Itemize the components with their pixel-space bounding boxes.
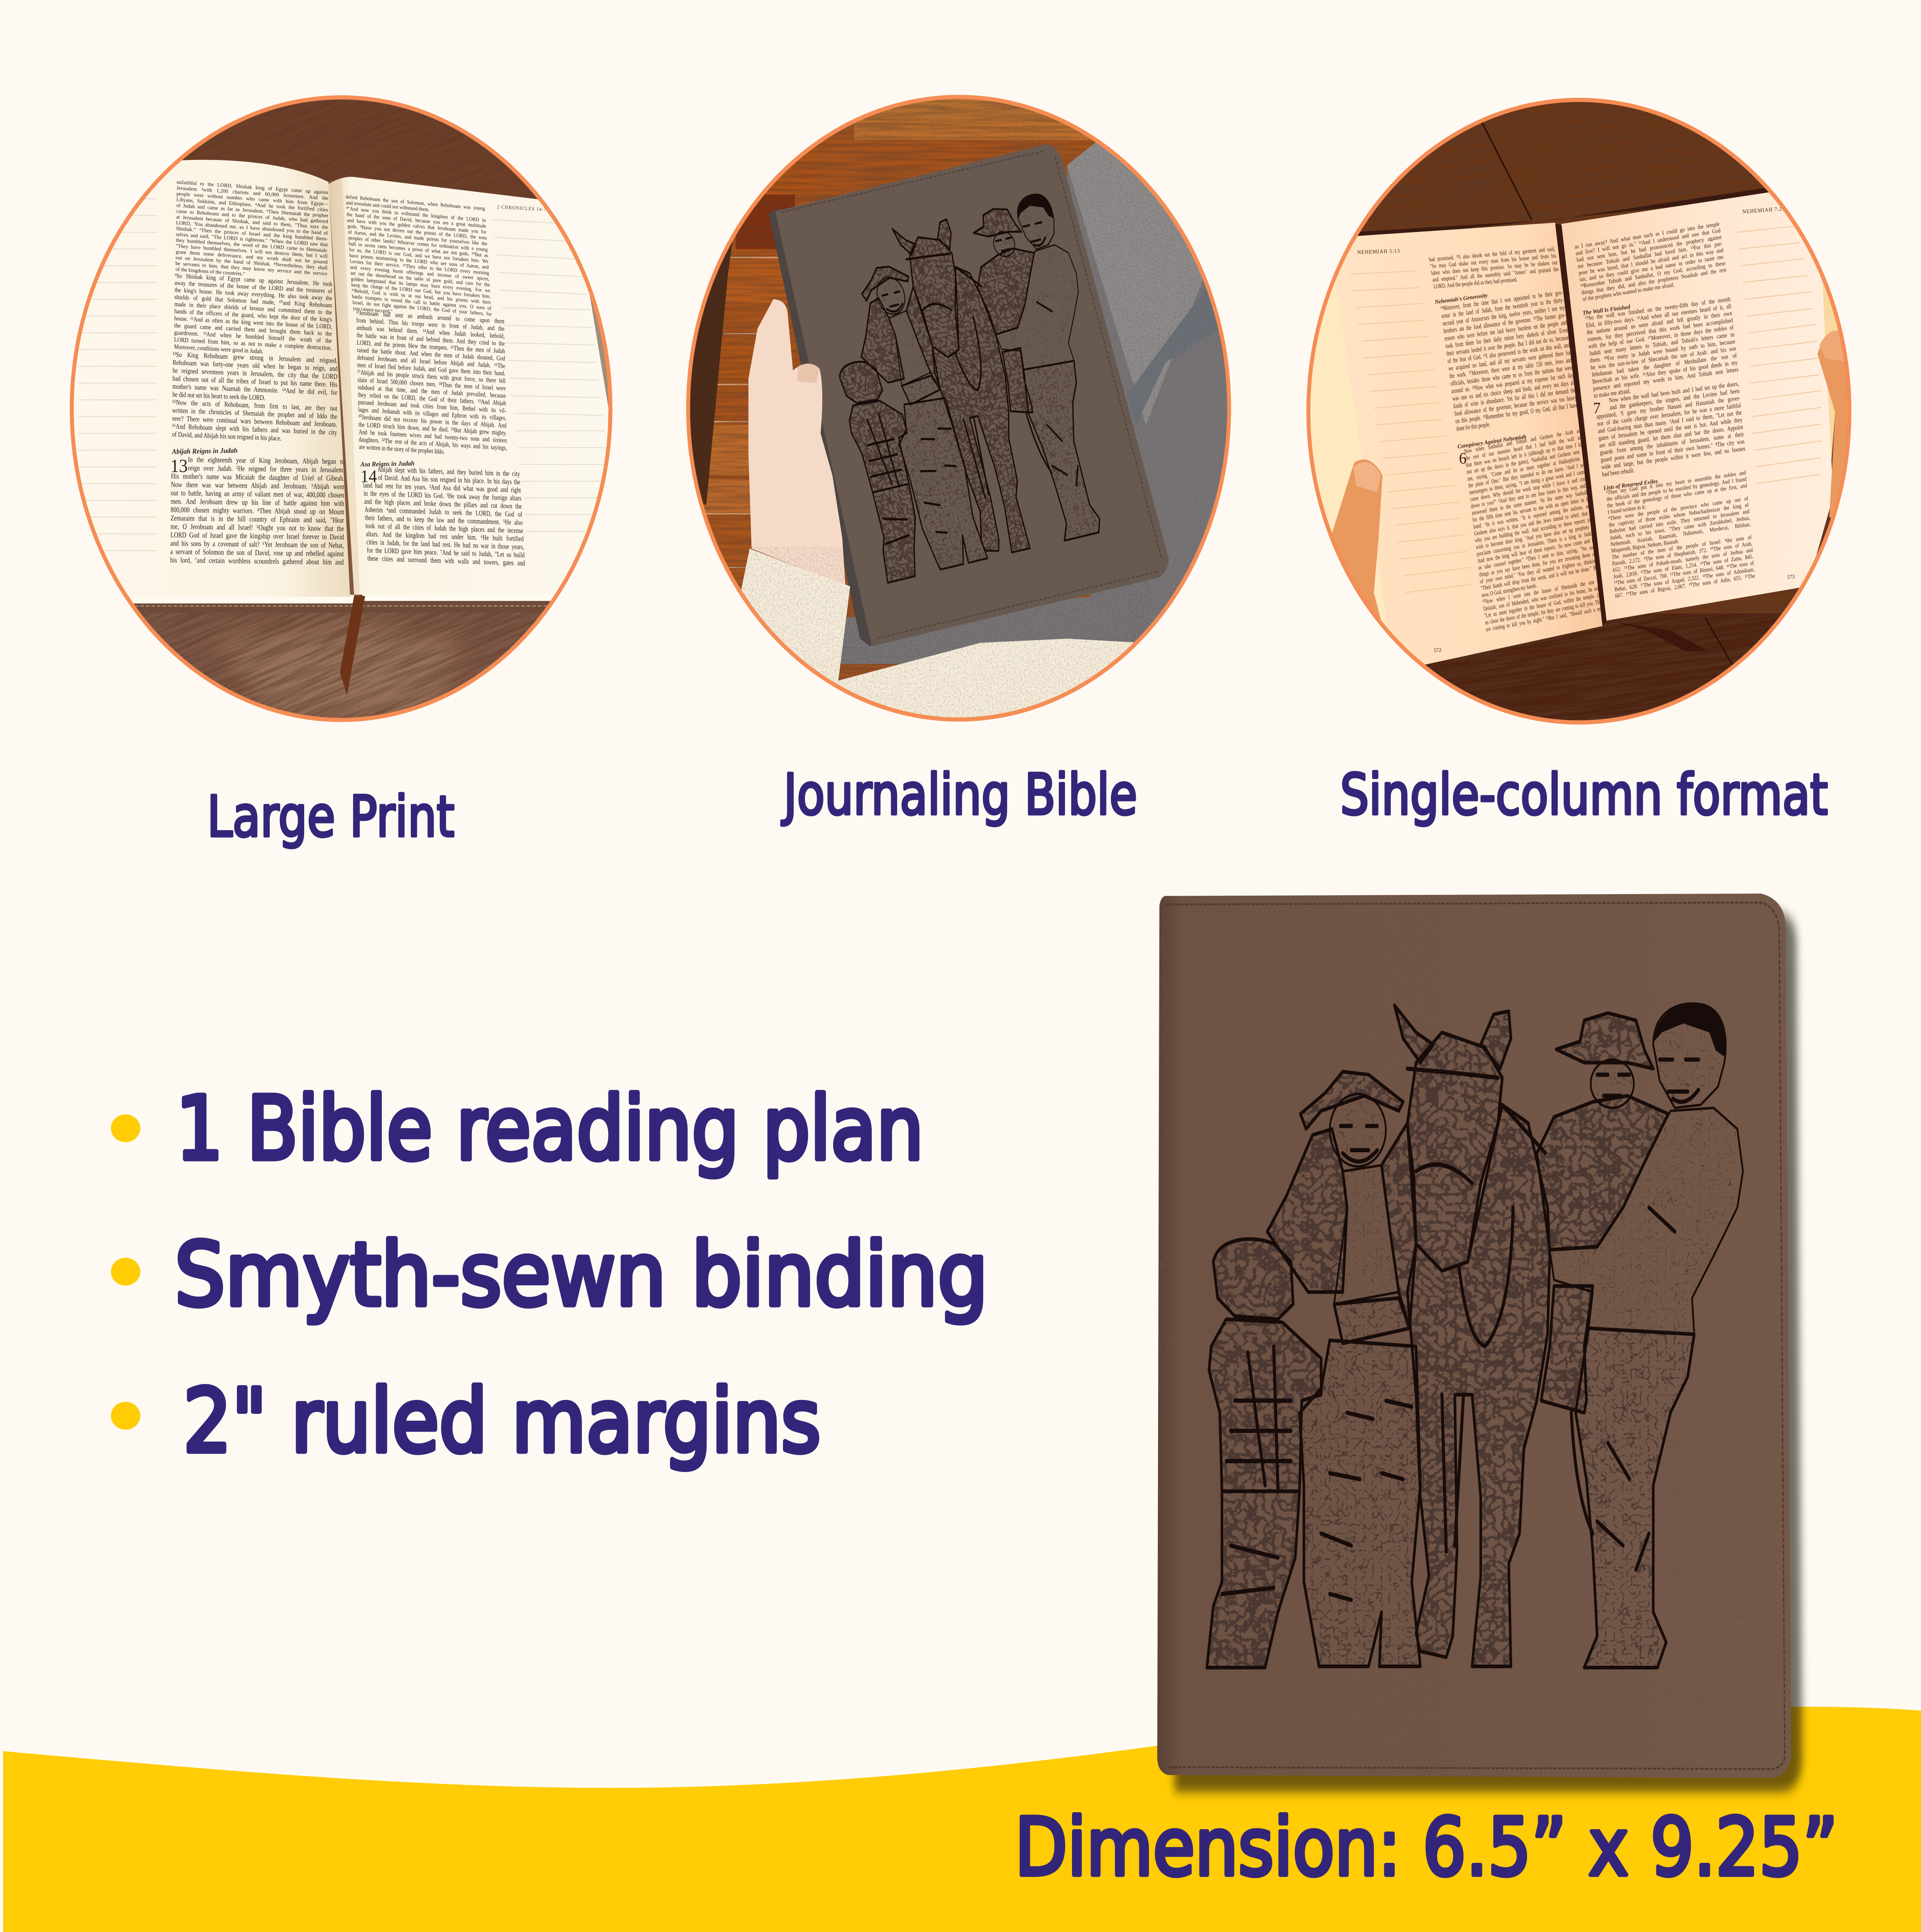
page stack edge xyxy=(1307,274,1390,641)
dark gutter xyxy=(1555,224,1606,626)
caption: Journaling Bible: Journaling Bible xyxy=(781,762,1137,828)
right page text: nehemiah column: of the prophets who wanted to make me afraid. xyxy=(1582,281,1675,303)
hands holding the book xyxy=(1331,459,1386,639)
photo circle: large print open Bible xyxy=(70,95,613,722)
right page text: chronicles column: 14 xyxy=(361,466,377,486)
cover xyxy=(1157,893,1791,1778)
large engraved leather Bible cover xyxy=(1157,893,1802,1792)
photo circle: journaling Bible held in hand xyxy=(618,77,1327,734)
right page text: chronicles column: are written in the story of the prophet Iddo. xyxy=(359,443,445,456)
orange ring xyxy=(72,97,611,720)
right page text: nehemiah column: Now when the wall had been built and I had set up the doors, and the gatekeepers, the singers, and the Levites had been appointed, ²I gave my brother Hanani and Hananiah the gover- nor of the castle charge over Jerusalem, for he was a more faithful and God-fearing man than many. ³And I said to them, "Let not the gates of Jerusalem be opened until the sun is hot. And while they are still standing guard, let them shut and bar the doors. Appoint guards from among the inhabitants of Jerusalem, some at their guard posts and some in front of their own homes." ⁴The city was wide and large, but the people within it were few, and no houses xyxy=(1596,380,1746,471)
bullet 2 xyxy=(111,1258,140,1286)
left page text: nehemiah column: done for this people. xyxy=(1456,420,1491,432)
right page text: chronicles column: 2 CHRONICLES 14:7 xyxy=(497,204,546,213)
right page text: nehemiah column: The Wall Is Finished xyxy=(1582,304,1631,316)
left page text: nehemiah column: now, O God, strengthen my hands. xyxy=(1481,582,1537,599)
ruled margin lines xyxy=(78,182,608,551)
left page text: nehemiah column: 6 xyxy=(1459,449,1467,467)
grey jeans xyxy=(838,140,1233,680)
left page text: nehemiah column: Nehemiah's Generosity xyxy=(1434,292,1488,306)
book drop shadow xyxy=(1170,912,1802,1792)
left page text: chronicles column: Abijah Reigns in Judah xyxy=(172,446,238,456)
left page xyxy=(1334,223,1603,666)
right page text: nehemiah column: to make me afraid. xyxy=(1593,387,1631,399)
right page text: chronicles column: you cannot succeed." xyxy=(352,305,393,315)
left page text: nehemiah column: Now when Sanballat and Tobiah and Geshem the Arab and the rest of our enemies heard that I had built the wall and that there was no breach left in it (although up to that time I had not set up the doors in the gates), ²Sanballat and Geshem sent to me, saying, "Come and let us meet together at Hakkephirim in the plain of Ono." But they intended to do me harm. ³And I sent messengers to them, saying, "I am doing a great work and I cannot come down. Why should the work stop while I leave it and come down to you?" ⁴And they sent to me four times in this way, and I answered them in the same manner. ⁵In the same way Sanballat for the fifth time sent his servant to me with an open letter in his hand. ⁶In it was written, "It is reported among the nations, and Geshem also says it, that you and the Jews intend to rebel; that is why you are building the wall. And according to these reports you wish to become their king. ⁷And you have also set up prophets to proclaim concerning you in Jerusalem, 'There is a king in Judah.' And now the king will hear of these reports. So now come and let us take counsel together." ⁸Then I sent to him, saying, "No such things as you say have been done, for you are inventing them out of your own mind." ⁹For they all wanted to frighten us, thinking, "Their hands will drop from the work, and it will not be done." But ¹⁰Now when I went into the house of Shemaiah the son of Delaiah, son of Mehetabel, who was confined to his home, he said, "Let us meet together in the house of God, within the temple. Let us close the doors of the temple, for they are coming to kill you. They are coming to kill you by night." ¹¹But I said, "Should such a man xyxy=(1464,427,1605,633)
left page text: chronicles column: ¹³So King Rehoboam grew strong in Jerusalem and reigned. Rehoboam was forty-one years old when he began to reign, and he reigned seventeen years in Jerusalem, the city that the LORD had chosen out of all the tribes of Israel to put his name there. His mother's name was Naamah the Ammonite. ¹⁴And he did evil, for ¹⁵Now the acts of Rehoboam, from first to last, are they not written in the chronicles of Shemaiah the prophet and of Iddo the seer? There were continual wars between Rehoboam and Jeroboam. ¹⁶And Rehoboam slept with his fathers and was buried in the city xyxy=(172,350,338,436)
cream sweater xyxy=(740,549,850,734)
left page xyxy=(62,160,350,597)
left page text: chronicles column: ⁹So Shishak king of Egypt came up against Jerusalem. He took away the treasures of the house of the LORD and the treasures of the king's house. He took away everything. He also took away the shields of gold that Solomon had made, ¹⁰and King Rehoboam made in their place shields of bronze and committed them to the hands of the officers of the guard, who kept the door of the king's house. ¹¹And as often as the king went into the house of the LORD, the guard came and carried them and brought them back to the guardroom. ¹²And when he humbled himself the wrath of the LORD turned from him, so as not to make a complete destruction. xyxy=(174,272,332,352)
right page text: chronicles column xyxy=(345,194,546,568)
right page text: nehemiah column: had been rebuilt. xyxy=(1602,466,1635,478)
photo circle: single-column format open Bible xyxy=(1145,0,1921,884)
right page text: chronicles column: Asa Reigns in Judah xyxy=(360,459,415,468)
ribbon bookmark xyxy=(340,596,365,695)
right page text: nehemiah column xyxy=(1574,206,1795,600)
orange ring xyxy=(1308,100,1850,723)
feature: binding: Smyth-sewn binding xyxy=(175,1224,988,1326)
gutter shadow xyxy=(328,178,360,597)
left page text: chronicles column: 13 xyxy=(170,456,188,476)
right page text: nehemiah column: I found written in it: xyxy=(1608,503,1646,515)
left page text: chronicles column: of David, and Abijah his son reigned in his place. xyxy=(172,430,281,442)
right page text: nehemiah column: Lists of Returned Exiles xyxy=(1603,478,1658,492)
left page text: nehemiah column: 572 xyxy=(1434,647,1441,653)
right page xyxy=(328,177,608,595)
right page text: nehemiah column: ¹⁵So the wall was finished on the twenty-fifth day of the month Elul, in fifty-two days. ¹⁶And when all our enemies heard of it, all the nations around us were afraid and fell greatly in their own esteem, for they perceived that this work had been accomplished with the help of our God. ¹⁷Moreover, in those days the nobles of Judah sent many letters to Tobiah, and Tobiah's letters came to them. ¹⁸For many in Judah were bound by oath to him, because he was the son-in-law of Shecaniah the son of Arah: and his son Jehohanan had taken the daughter of Meshullam the son of Berechiah as his wife. ¹⁹Also they spoke of his good deeds in my presence and reported my words to him. And Tobiah sent letters xyxy=(1585,296,1739,392)
caption: Large Print: Large Print xyxy=(207,784,454,850)
orange ring xyxy=(688,97,1229,719)
feature bullet list xyxy=(111,1078,988,1472)
right page xyxy=(1561,191,1833,621)
dark furniture beam xyxy=(689,232,734,505)
left page text: chronicles column: he did not set his heart to seek the LORD. xyxy=(172,390,265,402)
left page text: chronicles column: In the eighteenth year of King Jeroboam, Abijah began to reign over Judah. ²He reigned for three years in Jerusalem. His mother's name was Micaiah the daughter of Uriel of Gibeah. Now there was war between Abijah and Jeroboam. ³Abijah went out to battle, having an army of valiant men of war, 400,000 chosen men. And Jeroboam drew up his line of battle against him with 800,000 chosen mighty warriors. ⁴Then Abijah stood up on Mount Zemaraim that is in the hill country of Ephraim and said, "Hear me, O Jeroboam and all Israel! ⁵Ought you not to know that the LORD God of Israel gave the kingship over Israel forever to David and his sons by a covenant of salt? ⁶Yet Jeroboam the son of Nebat, a servant of Solomon the son of David, rose up and rebelled against his lord, ⁷and certain worthless scoundrels gathered about him and xyxy=(170,455,345,566)
right page text: nehemiah column: 573 xyxy=(1787,573,1795,580)
right page text: nehemiah column: ⁵Then my God put it into my heart to assemble the nobles and the officials and the people to be enrolled by genealogy. And I found the book of the genealogy of those who came up at the first, and ⁶These were the people of the province who came up out of the captivity of those exiles whom Nebuchadnezzar the king of Babylon had carried into exile. They returned to Jerusalem and Judah, each to his town. ⁷They came with Zerubbabel, Jeshua, Nehemiah, Azariah, Raamiah, Nahamani, Mordecai, Bilshan, The number of the men of the people of Israel: ⁸the sons of Parosh, 2,172. ⁹The sons of Shephatiah, 372. ¹⁰The sons of Arah, 652. ¹¹The sons of Pahath-moab, namely the sons of Jeshua and Joab, 2,818. ¹²The sons of Elam, 1,254. ¹³The sons of Zattu, 845. ¹⁴The sons of Zaccai, 760. ¹⁵The sons of Binnui, 648. ¹⁶The sons of Bebai, 628. ¹⁷The sons of Azgad, 2,322. ¹⁸The sons of Adonikam, 667. ¹⁹The sons of Bigvai, 2,067. ²⁰The sons of Adin, 655. ²¹The xyxy=(1606,469,1755,599)
left page text: chronicles column xyxy=(170,179,345,571)
engraved family portrait xyxy=(804,189,1139,583)
left page text: nehemiah column: ¹⁴Moreover, from the time that I was appointed to be their gov- ernor in the land of Judah, from the twentieth year to the thirty- second year of Artaxerxes the king, twelve years, neither I nor my brothers ate the food allowance of the governor. ¹⁵The former gov- ernors who were before me laid heavy burdens on the people and took from them for their daily ration forty shekels of silver. Even their servants lorded it over the people. But I did not do so, because of the fear of God. ¹⁶I also persevered in the work on this wall, and we acquired no land, and all my servants were gathered there for the work. ¹⁷Moreover, there were at my table 150 men, Jews and officials, besides those who came to us from the nations that were around us. ¹⁸Now what was prepared at my expense for each day was one ox and six choice sheep and birds, and every ten days all kinds of wine in abundance. Yet for all this I did not demand the food allowance of the governor, because the service was too heavy on this people. ¹⁹Remember for my good, O my God, all that I have xyxy=(1440,289,1578,425)
left page text: chronicles column: of the kingdoms of the countries." xyxy=(175,266,245,277)
right page text: nehemiah column: as I run away? And what man such as I could go into the temple and live? I will not go in." ¹²And I understood and saw that God had not sent him, but he had pronounced the prophecy against me because Tobiah and Sanballat had hired him. ¹³For this pur- pose he was hired, that I should be afraid and act in this way and sin, and so they could give me a bad name in order to taunt me. ¹⁴Remember Tobiah and Sanballat, O my God, according to these things that they did, and also the prophetess Noadiah and the rest xyxy=(1574,221,1727,296)
feature: margins: 2" ruled margins xyxy=(183,1371,821,1472)
right page text: chronicles column: Abijah slept with his fathers, and they buried him in the city of David. And Asa his son reigned in his place. In his days the land had rest for ten years. ²And Asa did what was good and right in the eyes of the LORD his God. ³He took away the foreign altars and the high places and broke down the pillars and cut down the Asherim ⁴and commanded Judah to seek the LORD, the God of their fathers, and to keep the law and the commandment. ⁵He also took out of all the cities of Judah the high places and the incense altars. And the kingdom had rest under him. ⁶He built fortified cities in Judah, for the land had rest. He had no war in those years, for the LORD gave him peace. ⁷And he said to Judah, "Let us build these cities and surround them with walls and towers, gates and xyxy=(363,465,525,567)
bullet 3 xyxy=(111,1402,140,1430)
engraved family portrait xyxy=(1207,1003,1743,1668)
left page text: nehemiah column xyxy=(1357,245,1605,653)
bullet 1 xyxy=(111,1114,140,1142)
right page text: chronicles column: defied Rehoboam the son of Solomon, when Rehoboam was young ⁸"And now you think to withstand the kingdom of the LORD in the hand of the sons of David, because you are a great multitude and have with you the golden calves that Jeroboam made you for gods. ⁹Have you not driven out the priests of the LORD, the sons of Aaron, and the Levites, and made priests for yourselves like the peoples of other lands? Whoever comes for ordination with a young bull or seven rams becomes a priest of what are not gods. ¹⁰But as for us, the LORD is our God, and we have not forsaken him. We have priests ministering to the LORD who are sons of Aaron, and Levites for their service. ¹¹They offer to the LORD every morning and every evening burnt offerings and incense of sweet spices, set out the showbread on the table of pure gold, and care for the golden lampstand that its lamps may burn every evening. For we keep the charge of the LORD our God, but you have forsaken him. ¹²Behold, God is with us at our head, and his priests with their battle trumpets to sound the call to battle against you. O sons of Israel, do not fight against the LORD, the God of your fathers, for xyxy=(345,194,492,317)
ruled margin lines xyxy=(1350,226,1821,593)
right page text: nehemiah column: 7 xyxy=(1593,399,1601,417)
right page text: chronicles column: and irresolute and could not withstand them. xyxy=(346,200,430,213)
cover stitching xyxy=(1166,903,1785,1769)
ribbon shadow xyxy=(1615,622,1709,651)
yellow wave footer band xyxy=(3,1707,1921,1932)
feature: reading plan: 1 Bible reading plan xyxy=(176,1078,924,1180)
left page text: nehemiah column: LORD. And the people did as they had promised. xyxy=(1433,276,1518,290)
left page text: nehemiah column: had promised. ¹³I also shook out the fold of my garment and said, "So may God shake out every man from his house and from his labor who does not keep this promise. So may he be shaken out and emptied." And all the assembly said "Amen" and praised the xyxy=(1428,245,1559,283)
left page text: nehemiah column: NEHEMIAH 5:13 xyxy=(1357,248,1400,255)
right page text: nehemiah column: NEHEMIAH 7:21 xyxy=(1742,206,1785,214)
left page text: nehemiah column: Conspiracy Against Nehemiah xyxy=(1457,434,1527,450)
left page text: chronicles column: Moreover, conditions were good in Judah. xyxy=(174,343,264,355)
left page text: chronicles column: unfaithful to the LORD, Shishak king of Egypt came up against Jerusalem ³with 1,200 chariots and 60,000 horsemen. And the people were without number who came with him from Egypt— Libyans, Sukkiim, and Ethiopians. ⁴And he took the fortified cities of Judah and came as far as Jerusalem. ⁵Then Shemaiah the prophet came to Rehoboam and to the princes of Judah, who had gathered at Jerusalem because of Shishak, and said to them, "Thus says the LORD, 'You abandoned me, so I have abandoned you to the hand of Shishak.'" ⁶Then the princes of Israel and the king humbled them- selves and said, "The LORD is righteous." ⁷When the LORD saw that they humbled themselves, the word of the LORD came to Shemaiah: "They have humbled themselves. I will not destroy them, but I will grant them some deliverance, and my wrath shall not be poured out on Jerusalem by the hand of Shishak. ⁸Nevertheless, they shall be servants to him, that they may know my service and the service xyxy=(175,179,328,277)
hand xyxy=(749,299,846,586)
right page text: nehemiah column: Mispereth, Bigvai, Nehum, Baanah. xyxy=(1611,538,1679,554)
engraved book in hand xyxy=(769,144,1169,646)
right page text: chronicles column: ¹³Jeroboam had sent an ambush around to come upon them from behind. Thus his troops were in front of Judah, and the ambush was behind them. ¹⁴And when Judah looked, behold, the battle was in front of and behind them. And they cried to the LORD, and the priests blew the trumpets. ¹⁵Then the men of Judah raised the battle shout. And when the men of Judah shouted, God defeated Jeroboam and all Israel before Abijah and Judah. ¹⁶The men of Israel fled before Judah, and God gave them into their hand. ¹⁷Abijah and his people struck them with great force, so there fell slain of Israel 500,000 chosen men. ¹⁸Thus the men of Israel were subdued at that time, and the men of Judah prevailed, because they relied on the LORD, the God of their fathers. ¹⁹And Abijah pursued Jeroboam and took cities from him, Bethel with its vil- lages and Jeshanah with its villages and Ephron with its villages. ²⁰Jeroboam did not recover his power in the days of Abijah. And the LORD struck him down, and he died. ²¹But Abijah grew mighty. And he took fourteen wives and had twenty-two sons and sixteen daughters. ²²The rest of the acts of Abijah, his ways and his sayings, xyxy=(356,309,507,452)
